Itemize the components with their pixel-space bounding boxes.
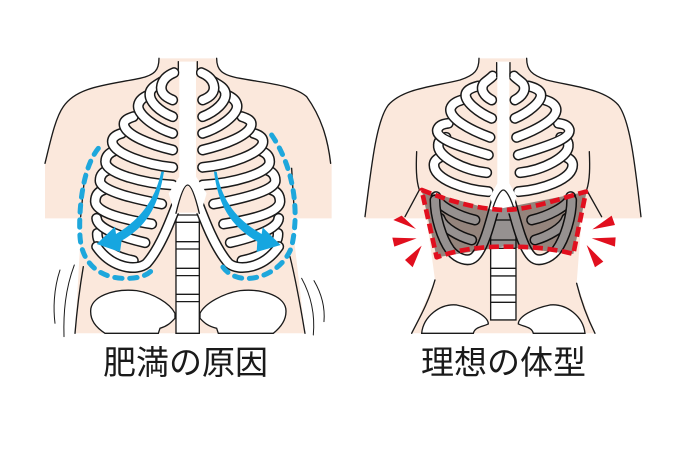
right ribs	[509, 76, 573, 260]
dashed outline left	[80, 148, 153, 278]
left ribs	[434, 76, 497, 260]
red burst left	[392, 216, 422, 267]
sternum	[490, 62, 517, 213]
highlighted waist area	[422, 190, 587, 257]
motion lines	[54, 265, 324, 337]
body outlines	[45, 58, 331, 333]
left ribs	[95, 73, 182, 268]
spine	[491, 210, 516, 320]
pelvis	[91, 290, 286, 333]
pelvis	[422, 305, 585, 333]
figure: obesity cause	[45, 58, 332, 337]
caption right: 理想の体型	[421, 344, 586, 381]
body skin	[45, 58, 332, 333]
arrow left	[97, 172, 164, 252]
right ribs	[194, 73, 280, 268]
caption left: 肥満の原因	[103, 344, 268, 381]
dashed outline right	[222, 135, 295, 278]
body skin	[365, 58, 642, 333]
body outlines	[365, 58, 641, 333]
sternum	[169, 62, 207, 213]
spine	[176, 207, 199, 333]
arrow right	[214, 172, 281, 252]
red burst right	[587, 216, 616, 267]
red dashed frame	[422, 190, 586, 257]
figure: ideal body	[365, 58, 642, 333]
